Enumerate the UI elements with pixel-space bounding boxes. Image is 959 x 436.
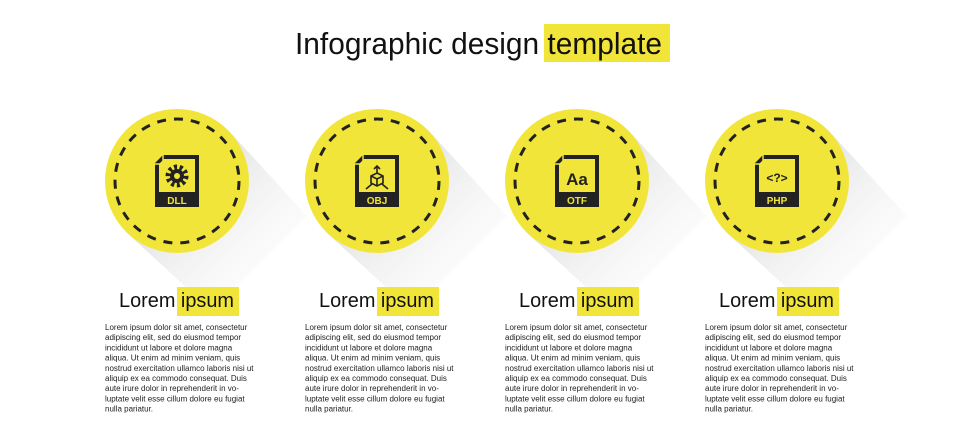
- body text 4: nostrud exercitation ullamco laboris nisi ut: [705, 364, 854, 373]
- body text 2: nostrud exercitation ullamco laboris nisi ut: [305, 364, 454, 373]
- icon: OTF file: Aa: [566, 170, 588, 189]
- body text 4: nulla pariatur.: [705, 405, 753, 414]
- icon: OBJ file: OBJ: [367, 196, 387, 207]
- body text 2: aute irure dolor in reprehenderit in vo-: [305, 384, 439, 393]
- body text 4: Lorem ipsum dolor sit amet, consectetur: [705, 323, 848, 332]
- body text 1: adipiscing elit, sed do eiusmod tempor: [105, 333, 241, 342]
- body text 4: aliquip ex ea commodo consequat. Duis: [705, 374, 847, 383]
- body text 2: aliqua. Ut enim ad minim veniam, quis: [305, 354, 440, 363]
- heading 1: Lorem ipsum: [119, 290, 234, 312]
- panel: OTF: [505, 109, 707, 311]
- icon: PHP file: <?>: [766, 171, 788, 185]
- body text 3: nulla pariatur.: [505, 405, 553, 414]
- body text 1: luptate velit esse cillum dolore eu fugiat: [105, 394, 245, 403]
- body text 1: nulla pariatur.: [105, 405, 153, 414]
- body text 3: adipiscing elit, sed do eiusmod tempor: [505, 333, 641, 342]
- body text 1: nostrud exercitation ullamco laboris nisi ut: [105, 364, 254, 373]
- icon: OTF file: OTF: [567, 196, 587, 207]
- body text 1: aliquip ex ea commodo consequat. Duis: [105, 374, 247, 383]
- title: Infographic design template: [295, 26, 662, 61]
- body text 2: nulla pariatur.: [305, 405, 353, 414]
- icon: OTF file: [555, 155, 599, 207]
- body text 3: Lorem ipsum dolor sit amet, consectetur: [505, 323, 648, 332]
- heading 2: Lorem ipsum: [319, 290, 434, 312]
- body text 3: aute irure dolor in reprehenderit in vo-: [505, 384, 639, 393]
- icon: DLL file: DLL: [167, 196, 187, 207]
- body text 2: adipiscing elit, sed do eiusmod tempor: [305, 333, 441, 342]
- icon: PHP file: [755, 155, 799, 207]
- body text 4: adipiscing elit, sed do eiusmod tempor: [705, 333, 841, 342]
- body text 3: nostrud exercitation ullamco laboris nisi ut: [505, 364, 654, 373]
- body text 1: Lorem ipsum dolor sit amet, consectetur: [105, 323, 248, 332]
- body text 3: incididunt ut labore et dolore magna: [505, 343, 633, 352]
- body text 4: luptate velit esse cillum dolore eu fugiat: [705, 394, 845, 403]
- body text 3: aliquip ex ea commodo consequat. Duis: [505, 374, 647, 383]
- headings and texts: [105, 287, 854, 414]
- body text 1: aute irure dolor in reprehenderit in vo-: [105, 384, 239, 393]
- icon: OBJ file: [355, 155, 399, 207]
- body text 2: luptate velit esse cillum dolore eu fugiat: [305, 394, 445, 403]
- body text 1: aliqua. Ut enim ad minim veniam, quis: [105, 354, 240, 363]
- panel: DLL: [105, 109, 307, 311]
- body text 4: aliqua. Ut enim ad minim veniam, quis: [705, 354, 840, 363]
- icon: DLL file: [155, 155, 199, 207]
- panel: PHP: [705, 109, 907, 311]
- body text 3: aliqua. Ut enim ad minim veniam, quis: [505, 354, 640, 363]
- heading 4: Lorem ipsum: [719, 290, 834, 312]
- icon: PHP file: PHP: [767, 196, 788, 207]
- body text 1: incididunt ut labore et dolore magna: [105, 343, 233, 352]
- body text 2: Lorem ipsum dolor sit amet, consectetur: [305, 323, 448, 332]
- body text 2: incididunt ut labore et dolore magna: [305, 343, 433, 352]
- body text 2: aliquip ex ea commodo consequat. Duis: [305, 374, 447, 383]
- heading 3: Lorem ipsum: [519, 290, 634, 312]
- body text 4: incididunt ut labore et dolore magna: [705, 343, 833, 352]
- body text 4: aute irure dolor in reprehenderit in vo-: [705, 384, 839, 393]
- panel: OBJ: [305, 109, 507, 311]
- body text 3: luptate velit esse cillum dolore eu fugiat: [505, 394, 645, 403]
